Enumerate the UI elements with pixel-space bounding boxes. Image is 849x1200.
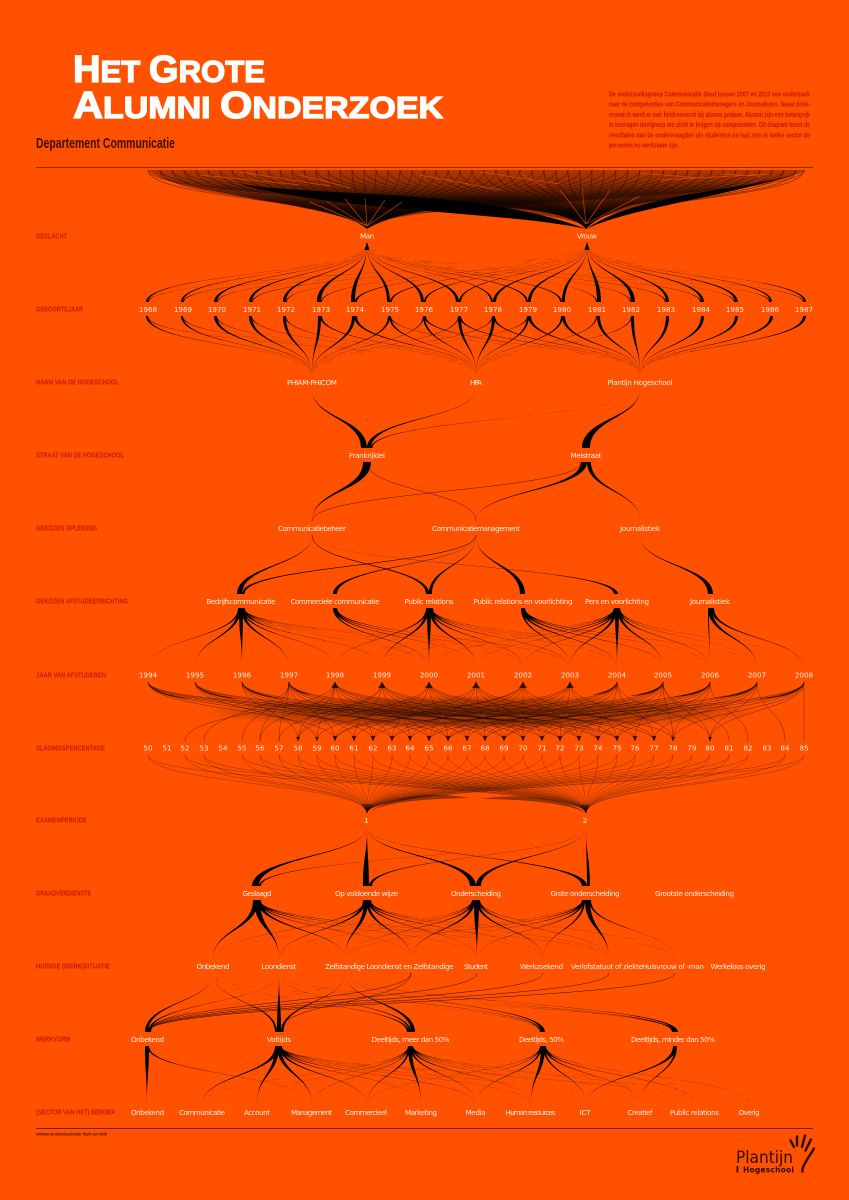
title: ALUMNI ONDERZOEK — [73, 85, 444, 127]
row: slagingspercentage — [36, 744, 809, 752]
row: examenperiode: EXAMENPERIODE — [36, 816, 87, 824]
row: slagingspercentage: 53 — [199, 744, 209, 752]
row: geslacht: Man — [360, 232, 374, 240]
row: huidige werksituatie: HUIDIGE (WERK)SITUATIE — [36, 962, 110, 970]
row: slagingspercentage: 55 — [237, 744, 247, 752]
flow: graadverdienste to huidige situatie — [213, 900, 675, 959]
row: slagingspercentage: 72 — [555, 744, 565, 752]
row: werkvorm: Deeltijds, meer dan 50% — [372, 1035, 450, 1044]
row: slagingspercentage: 80 — [705, 744, 715, 752]
row: jaar van afstuderen: 1999 — [373, 670, 392, 680]
row: graadverdienste: Geslaagd — [242, 889, 272, 898]
row: graadverdienste: Op voldoende wijze — [335, 889, 399, 898]
row: straat van de hogeschool — [36, 450, 602, 460]
row: jaar van afstuderen: 1997 — [280, 670, 298, 680]
row: gekozen opleiding: Journalistiek — [619, 524, 661, 533]
row: sector van het beroep — [36, 1108, 760, 1117]
row: sector van het beroep: (SECTOR VAN HET) BEROEP — [36, 1108, 115, 1116]
flow: hogeschool to straat — [312, 389, 640, 448]
row: slagingspercentage: 84 — [780, 744, 790, 752]
row: gekozen afstudeerrichting: Pers en voorlichting — [585, 597, 649, 606]
row: jaar van afstuderen: 2006 — [701, 670, 720, 680]
intro text block — [609, 90, 810, 150]
row: jaar van afstuderen: 1996 — [233, 670, 252, 680]
row: slagingspercentage: 64 — [405, 744, 415, 752]
row: geboortejaar: 1973 — [312, 305, 330, 314]
row: jaar van afstuderen: 2008 — [795, 670, 814, 680]
row: geboortejaar: 1983 — [657, 305, 675, 314]
row: geboortejaar: 1975 — [381, 305, 399, 314]
row: slagingspercentage: 75 — [612, 744, 622, 752]
row: jaar van afstuderen: 2002 — [514, 670, 532, 680]
row: slagingspercentage: 79 — [687, 744, 697, 752]
flow: respondents to geslacht — [148, 170, 806, 229]
logo: Plantijn Hogeschool — [736, 1136, 814, 1174]
row: slagingspercentage: 62 — [368, 744, 378, 752]
row: werkvorm — [36, 1034, 715, 1044]
row: slagingspercentage: 66 — [443, 744, 453, 752]
row: sector van het beroep: Commercieel — [345, 1108, 387, 1117]
row: graadverdienste: Onderscheiding — [451, 889, 501, 898]
row: gekozen afstudeerrichting: Public relations en voorlichting — [474, 597, 572, 606]
row: geboortejaar — [36, 304, 813, 314]
row: geboortejaar: 1976 — [415, 305, 434, 314]
flow: werkvorm to beroep — [145, 1046, 750, 1105]
row: slagingspercentage: 82 — [743, 744, 753, 752]
row: geboortejaar: 1980 — [553, 305, 572, 314]
row: sector van het beroep: Account — [244, 1108, 270, 1117]
row: geboortejaar: 1971 — [243, 305, 261, 314]
row: graadverdienste — [36, 888, 734, 898]
row: geboortejaar: 1987 — [795, 305, 813, 314]
row: straat van de hogeschool: Meistraat — [570, 451, 602, 460]
subtitle: Departement Communicatie — [36, 136, 175, 152]
row: geslacht: Vrouw — [577, 232, 597, 240]
row: jaar van afstuderen: 1998 — [326, 670, 345, 680]
row: sector van het beroep: ICT — [580, 1108, 591, 1117]
row: slagingspercentage: 67 — [462, 744, 472, 752]
row: naam van de hogeschool — [36, 378, 672, 387]
row: slagingspercentage: 78 — [668, 744, 678, 752]
row: geboortejaar: 1984 — [692, 305, 711, 314]
row: sector van het beroep: Creatief — [628, 1108, 653, 1117]
row: slagingspercentage: 51 — [162, 744, 172, 752]
flow: straat to opleiding — [312, 462, 640, 521]
row: slagingspercentage: SLAGINGSPERCENTAGE — [36, 744, 105, 752]
flow: jaar van afstuderen to slagingspercentage — [148, 682, 804, 741]
row: sector van het beroep: Public relations — [670, 1108, 719, 1117]
row: huidige werksituatie: Verlofstatuut of ziekte — [571, 962, 644, 971]
row: gekozen afstudeerrichting — [36, 596, 731, 606]
row: werkvorm: Deeltijds, 50% — [519, 1035, 564, 1044]
row: gekozen opleiding — [36, 524, 661, 533]
row: slagingspercentage: 83 — [762, 744, 772, 752]
row: geboortejaar: 1974 — [346, 305, 365, 314]
row: slagingspercentage: 69 — [499, 744, 509, 752]
row: sector van het beroep: Communicatie — [179, 1108, 226, 1117]
row: examenperiode: 2 — [583, 816, 587, 825]
row: geboortejaar: 1970 — [208, 305, 227, 314]
row: geboortejaar: 1978 — [484, 305, 503, 314]
intro text block: personen nu werkzaam zijn. — [609, 141, 679, 150]
row: sector van het beroep: Management — [291, 1108, 332, 1117]
row: geboortejaar: 1981 — [588, 305, 606, 314]
flow: geboortejaar to hogeschool — [146, 316, 806, 375]
row: graadverdienste: Grootste onderscheiding — [655, 889, 734, 898]
logo: Plantijn Hogeschool: Plantijn — [736, 1148, 793, 1167]
row: jaar van afstuderen — [36, 670, 814, 680]
row: geboortejaar: 1979 — [519, 305, 538, 314]
row: werkvorm: Deeltijds, minder dan 50% — [631, 1035, 715, 1044]
row: werkvorm: Voltijds — [267, 1035, 291, 1044]
row: sector van het beroep: Overig — [738, 1108, 760, 1117]
row: huidige werksituatie: Loondienst en Zelfstandige — [366, 962, 454, 971]
row: huidige werksituatie: Loondienst — [262, 962, 297, 971]
row: examenperiode — [36, 816, 587, 825]
row: gekozen opleiding: Communicatiebeheer — [278, 524, 346, 533]
row: graadverdienste: GRAADVERDIENSTE — [36, 888, 91, 898]
row: naam van de hogeschool: PHIAM-PHICOM — [287, 378, 337, 387]
row: slagingspercentage: 54 — [218, 744, 228, 752]
row: slagingspercentage: 56 — [255, 744, 265, 752]
row: slagingspercentage: 58 — [293, 744, 303, 752]
row: geboortejaar: 1977 — [450, 305, 468, 314]
row: sector van het beroep: Human resources — [506, 1108, 556, 1117]
row: geboortejaar: 1982 — [622, 305, 640, 314]
row: geboortejaar: 1969 — [174, 305, 193, 314]
row: huidige werksituatie: Student — [464, 962, 488, 971]
row: jaar van afstuderen: 2000 — [420, 670, 439, 680]
row: jaar van afstuderen: 1994 — [139, 670, 158, 680]
row: slagingspercentage: 74 — [593, 744, 603, 752]
row: slagingspercentage: 57 — [274, 744, 284, 752]
row: examenperiode: 1 — [364, 816, 369, 825]
row: geboortejaar: GEBOORTEJAAR — [36, 304, 84, 314]
row: naam van de hogeschool: HPA — [470, 378, 482, 387]
row: slagingspercentage: 68 — [480, 744, 490, 752]
row: slagingspercentage: 77 — [649, 744, 659, 752]
row: geboortejaar: 1985 — [726, 305, 744, 314]
row: gekozen afstudeerrichting: GEKOZEN AFSTUDEERRICHTING — [36, 596, 128, 606]
row: naam van de hogeschool: NAAM VAN DE HOGESCHOOL — [36, 378, 119, 386]
row: werkvorm: Onbekend — [131, 1035, 164, 1044]
row: naam van de hogeschool: Plantijn Hogeschool — [608, 378, 672, 387]
row: slagingspercentage: 81 — [724, 744, 734, 752]
row: huidige werksituatie — [36, 962, 766, 971]
row: geslacht: GESLACHT — [36, 232, 67, 240]
row: sector van het beroep: Media — [466, 1108, 486, 1117]
flow: examenperiode to graadverdienste — [252, 827, 590, 886]
flow: opleiding to afstudeerrichting — [237, 535, 713, 594]
row: jaar van afstuderen: 2003 — [561, 670, 579, 680]
row: huidige werksituatie: Onbekend — [196, 962, 230, 971]
credit: ontwerp en datavisualisatie: Mark van Vorik — [36, 1132, 107, 1136]
row: huidige werksituatie: Werkzoekend — [520, 962, 563, 971]
row: slagingspercentage: 70 — [518, 744, 528, 752]
row: slagingspercentage: 76 — [630, 744, 640, 752]
row: huidige werksituatie: Werkeloos overig — [710, 962, 766, 971]
row: gekozen opleiding: GEKOZEN OPLEIDING — [36, 524, 97, 532]
row: huidige werksituatie: Huisvrouw of -man — [642, 962, 704, 971]
row: slagingspercentage: 71 — [537, 744, 547, 752]
row: slagingspercentage: 60 — [330, 744, 340, 752]
row: slagingspercentage: 61 — [349, 744, 359, 752]
row: gekozen afstudeerrichting: Public relations — [404, 597, 454, 606]
row: slagingspercentage: 73 — [574, 744, 584, 752]
top rule — [36, 167, 813, 168]
row: huidige werksituatie: Zelfstandige — [325, 962, 366, 971]
row: jaar van afstuderen: 1995 — [186, 670, 204, 680]
row: slagingspercentage: 63 — [387, 744, 397, 752]
row: geslacht — [36, 232, 597, 240]
bottom rule — [36, 1128, 813, 1129]
row: jaar van afstuderen: 2004 — [608, 670, 627, 680]
row: geboortejaar: 1986 — [761, 305, 780, 314]
row: slagingspercentage: 85 — [799, 744, 809, 752]
row: straat van de hogeschool: STRAAT VAN DE HOGESCHOOL — [36, 450, 124, 460]
row: jaar van afstuderen: 2001 — [467, 670, 485, 680]
row: sector van het beroep: Onbekend — [131, 1108, 164, 1117]
row: gekozen afstudeerrichting: Journalistiek — [689, 597, 731, 606]
row: slagingspercentage: 65 — [424, 744, 434, 752]
row: jaar van afstuderen: 2007 — [748, 670, 766, 680]
logo: Plantijn Hogeschool: Hogeschool — [743, 1166, 794, 1174]
row: gekozen afstudeerrichting: Bedrijfscommunicatie — [206, 597, 276, 606]
row: jaar van afstuderen: JAAR VAN AFSTUDEREN — [36, 670, 106, 680]
flow: afstudeerrichting to jaar van afstuderen — [148, 608, 804, 668]
row: sector van het beroep: Marketing — [405, 1108, 437, 1117]
flow: slagingspercentage to examenperiode — [148, 755, 804, 813]
row: slagingspercentage: 59 — [312, 744, 322, 752]
title — [73, 49, 444, 127]
row: straat van de hogeschool: Frankrijklei — [349, 451, 385, 460]
row: geboortejaar: 1972 — [277, 305, 295, 314]
flow: huidige situatie to werkvorm — [145, 973, 678, 1032]
row: werkvorm: WERKVORM — [36, 1034, 70, 1044]
row: jaar van afstuderen: 2005 — [654, 670, 672, 680]
row: geboortejaar: 1968 — [139, 305, 158, 314]
row: graadverdienste: Grote onderscheiding — [550, 889, 620, 898]
title: HET GROTE — [73, 49, 265, 91]
flow: geslacht to geboortejaar — [146, 242, 806, 302]
row: slagingspercentage: 52 — [180, 744, 190, 752]
row: gekozen opleiding: Communicatiemanagement — [432, 524, 520, 533]
row: gekozen afstudeerrichting: Commerciele communicatie — [290, 597, 380, 606]
row: slagingspercentage: 50 — [143, 744, 153, 752]
